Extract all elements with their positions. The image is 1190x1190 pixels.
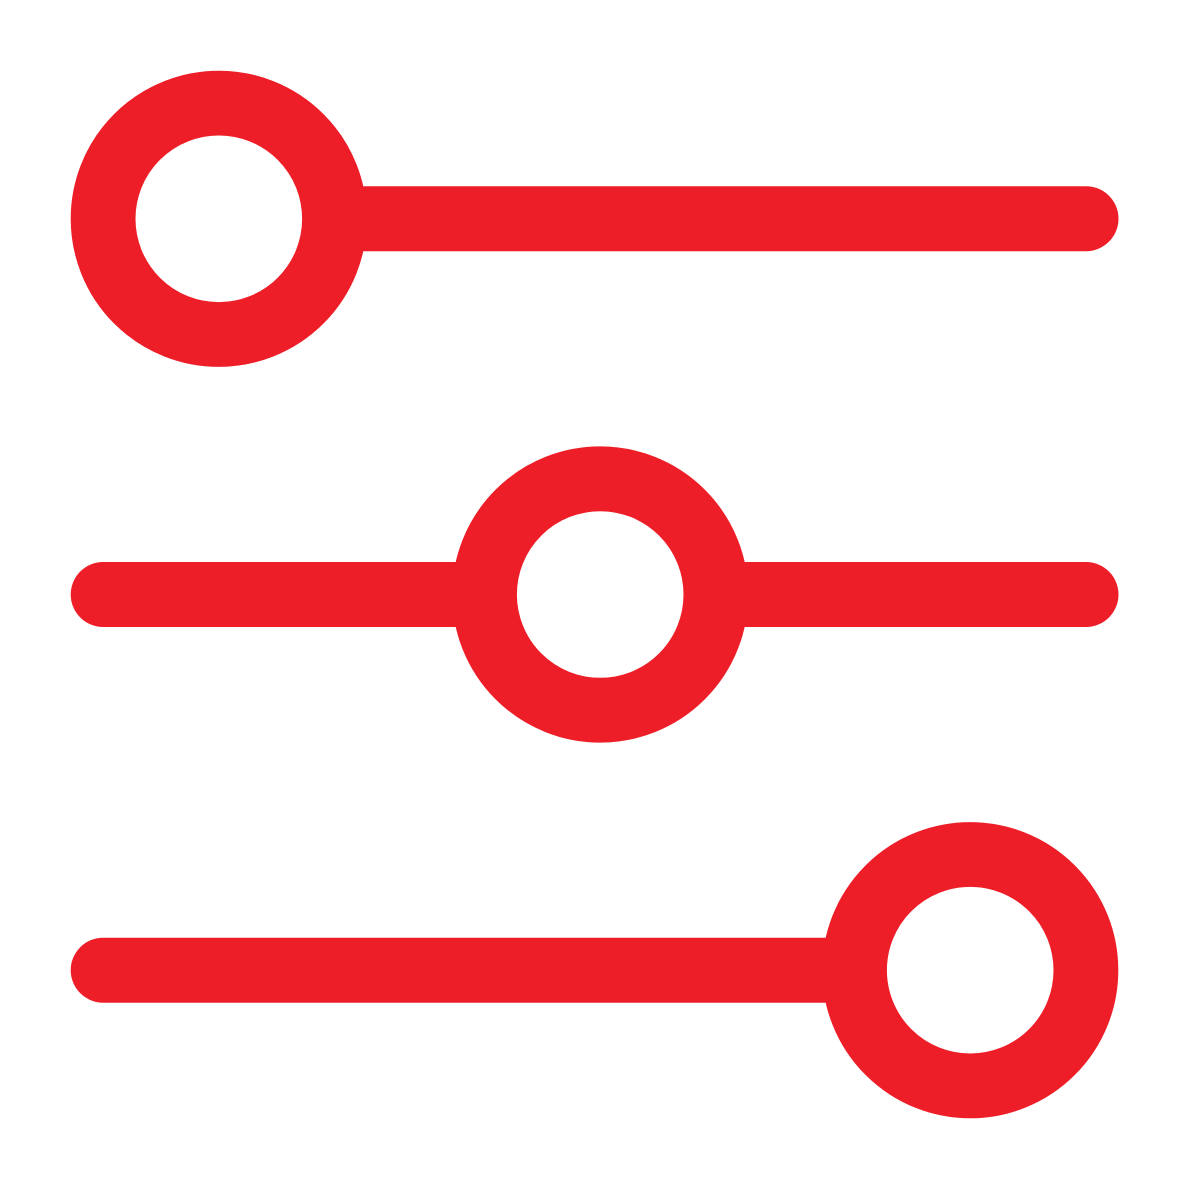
slider: bottom row: [103, 854, 1086, 1086]
slider: top row: [103, 103, 1086, 334]
slider: middle row: [103, 479, 1086, 710]
